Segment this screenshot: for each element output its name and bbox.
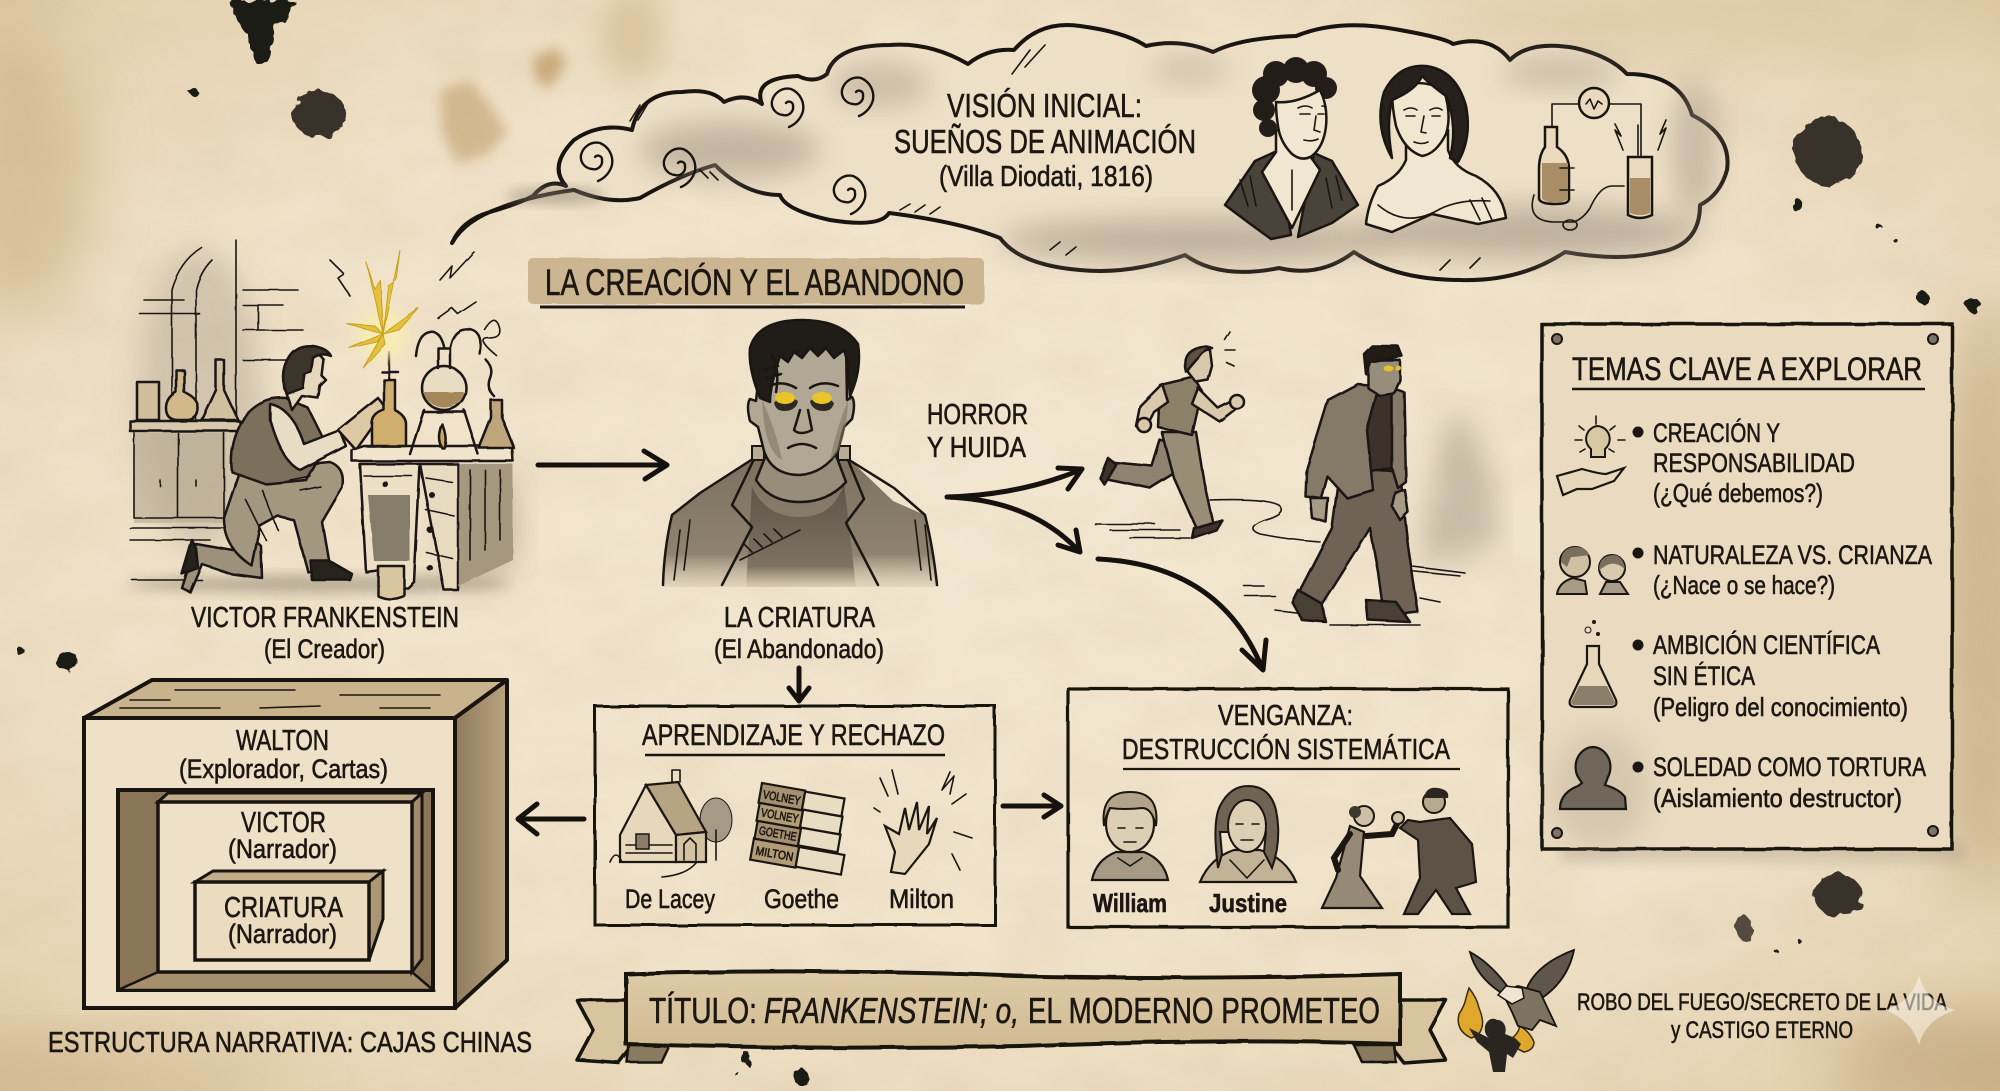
theme 1: creación y responsabilidad: RESPONSABILIDAD xyxy=(1653,448,1855,478)
desk xyxy=(352,446,513,599)
arrow: creature down to learning xyxy=(789,668,809,701)
theme 2: naturaleza vs crianza xyxy=(1557,540,1932,600)
banner text: EL MODERNO PROMETEO xyxy=(1028,990,1380,1031)
illustration: monster walking xyxy=(1244,346,1500,625)
icon: rejected hand xyxy=(874,770,972,874)
box labels xyxy=(179,725,388,949)
box labels: VICTOR xyxy=(241,807,326,839)
banner ribbon xyxy=(626,971,1400,1048)
panel nails xyxy=(1552,334,1938,838)
arrow: learning to nested boxes xyxy=(518,804,584,834)
arrow: victor to creature xyxy=(538,451,667,479)
icon: stacked books: VOLNEY xyxy=(762,787,802,808)
learning captions: Milton xyxy=(889,884,954,914)
theme 2: naturaleza vs crianza: NATURALEZA VS. CRIANZA xyxy=(1653,540,1932,570)
boots xyxy=(1292,590,1410,622)
label: victor frankenstein xyxy=(191,602,459,664)
theme 1: creación y responsabilidad: CREACIÓN Y xyxy=(1653,417,1780,448)
illustration: victor running xyxy=(1095,332,1320,542)
inner box xyxy=(195,871,383,960)
shelf flasks xyxy=(137,360,238,420)
panel heading: TEMAS CLAVE A EXPLORAR xyxy=(1572,351,1922,387)
torso and arms xyxy=(1158,377,1202,435)
banner text: FRANKENSTEIN; o, xyxy=(764,990,1019,1031)
box labels: (Explorador, Cartas) xyxy=(179,754,388,784)
banner tails xyxy=(577,1000,1446,1063)
label: horror y huida xyxy=(927,399,1028,464)
cloud shape xyxy=(452,25,1728,280)
head xyxy=(1368,360,1400,396)
label: horror y huida: Y HUIDA xyxy=(927,432,1027,464)
box labels: (Narrador) xyxy=(228,834,337,864)
panel: aprendizaje y rechazo xyxy=(595,706,995,925)
icon: two children xyxy=(1557,547,1628,594)
theme 3: ambición científica: (Peligro del conocimiento) xyxy=(1653,692,1908,722)
vengeance heading: DESTRUCCIÓN SISTEMÁTICA xyxy=(1122,733,1451,766)
head xyxy=(748,320,859,475)
arrow: curve to venganza xyxy=(1098,559,1266,670)
panel: venganza xyxy=(1068,689,1508,927)
theme 1: creación y responsabilidad: (¿Qué debemos?) xyxy=(1653,478,1823,508)
outer box top xyxy=(84,680,507,718)
theme 4: soledad como tortura: (Aislamiento destructor) xyxy=(1653,783,1902,813)
vengeance heading: VENGANZA: xyxy=(1218,700,1353,732)
banner text xyxy=(649,990,1380,1031)
portrait: justine: Justine xyxy=(1209,888,1287,918)
arrow: learning to vengeance xyxy=(1003,795,1061,817)
box labels: CRIATURA xyxy=(224,892,344,924)
learning captions xyxy=(625,884,954,914)
portrait: william xyxy=(1092,792,1168,918)
theme 4: soledad como tortura xyxy=(1560,747,1926,813)
legs xyxy=(1298,468,1418,616)
label: la criatura: LA CRIATURA xyxy=(724,602,876,634)
thought cloud: vision inicial xyxy=(452,25,1728,280)
portrait: justine xyxy=(1200,786,1296,918)
banner text: TÍTULO: xyxy=(649,990,757,1031)
caption: fire and punishment xyxy=(1577,989,1947,1044)
illustration: victor in the laboratory xyxy=(130,240,520,599)
cloud heading: SUEÑOS DE ANIMACIÓN xyxy=(894,123,1196,160)
label: victor frankenstein: VICTOR FRANKENSTEIN xyxy=(191,602,459,634)
hands xyxy=(1310,490,1408,522)
front leg xyxy=(1162,432,1214,532)
theme 4: soledad como tortura: SOLEDAD COMO TORTURA xyxy=(1653,752,1926,782)
outer box side xyxy=(455,680,507,1008)
coat xyxy=(663,453,939,587)
caption: fire and punishment: y CASTIGO ETERNO xyxy=(1671,1017,1853,1044)
sparkle watermark xyxy=(1885,975,1955,1045)
panel: temas clave a explorar xyxy=(1542,324,1965,862)
label: horror y huida: HORROR xyxy=(927,399,1028,431)
icon: prometheus and eagle xyxy=(1458,950,1574,1072)
cloud heading: VISIÓN INICIAL: xyxy=(947,87,1142,124)
caption: estructura narrativa: ESTRUCTURA NARRATIVA: CAJAS CHINAS xyxy=(48,1027,532,1059)
label: la criatura: (El Abandonado) xyxy=(714,634,884,664)
portrait: young man xyxy=(1225,57,1358,239)
heading: la creación y el abandono: LA CREACIÓN Y EL ABANDONO xyxy=(545,262,964,303)
icon: stacked books xyxy=(750,783,845,876)
theme 1: creación y responsabilidad xyxy=(1557,416,1855,508)
shelf and cabinet xyxy=(130,421,240,580)
theme 3: ambición científica xyxy=(1570,620,1908,722)
electric sparks xyxy=(330,250,500,368)
box labels: WALTON xyxy=(236,725,329,757)
icon: light bulb over hand xyxy=(1557,416,1625,495)
victor figure xyxy=(182,346,386,592)
glassware on desk xyxy=(372,329,514,454)
icon: stacked books: GOETHE xyxy=(758,823,798,844)
icon: lone silhouette xyxy=(1560,747,1626,809)
panel: nested boxes, narrative structure xyxy=(84,680,507,1008)
learning captions: De Lacey xyxy=(625,884,715,914)
icon: flask xyxy=(1570,620,1616,707)
cloud heading: (Villa Diodati, 1816) xyxy=(939,161,1153,193)
window and wall xyxy=(140,240,303,420)
cloud heading xyxy=(894,87,1196,193)
neck and bolts xyxy=(752,446,850,502)
back leg xyxy=(1102,440,1184,488)
middle box xyxy=(158,793,422,972)
arrows: horror y huida split xyxy=(947,468,1082,552)
heading: la creación y el abandono xyxy=(528,258,984,307)
label: victor frankenstein: (El Creador) xyxy=(264,634,385,664)
icon: stacked books: VOLNEY xyxy=(760,805,800,826)
vengeance heading xyxy=(1122,700,1460,769)
theme 3: ambición científica: SIN ÉTICA xyxy=(1653,661,1755,691)
theme 3: ambición científica: AMBICIÓN CIENTÍFICA xyxy=(1653,629,1880,660)
banner: título xyxy=(577,971,1446,1063)
illustration: the creature xyxy=(663,320,939,587)
learning captions: Goethe xyxy=(764,884,839,914)
learning heading: APRENDIZAJE Y RECHAZO xyxy=(642,719,945,752)
jacket xyxy=(1305,384,1379,498)
theme 2: naturaleza vs crianza: (¿Nace o se hace?) xyxy=(1653,570,1835,600)
portrait: woman xyxy=(1366,66,1506,232)
icon: galvanic apparatus xyxy=(1532,88,1666,230)
box labels: (Narrador) xyxy=(228,919,337,949)
label: la criatura xyxy=(714,602,884,664)
torso xyxy=(1354,392,1398,472)
head xyxy=(1188,350,1212,382)
icon: cottage xyxy=(610,770,732,877)
illustration: struggle xyxy=(1322,788,1476,914)
portrait: william: William xyxy=(1093,888,1167,918)
outer box front xyxy=(84,718,455,1008)
icon: stacked books: MILTON xyxy=(755,844,794,864)
